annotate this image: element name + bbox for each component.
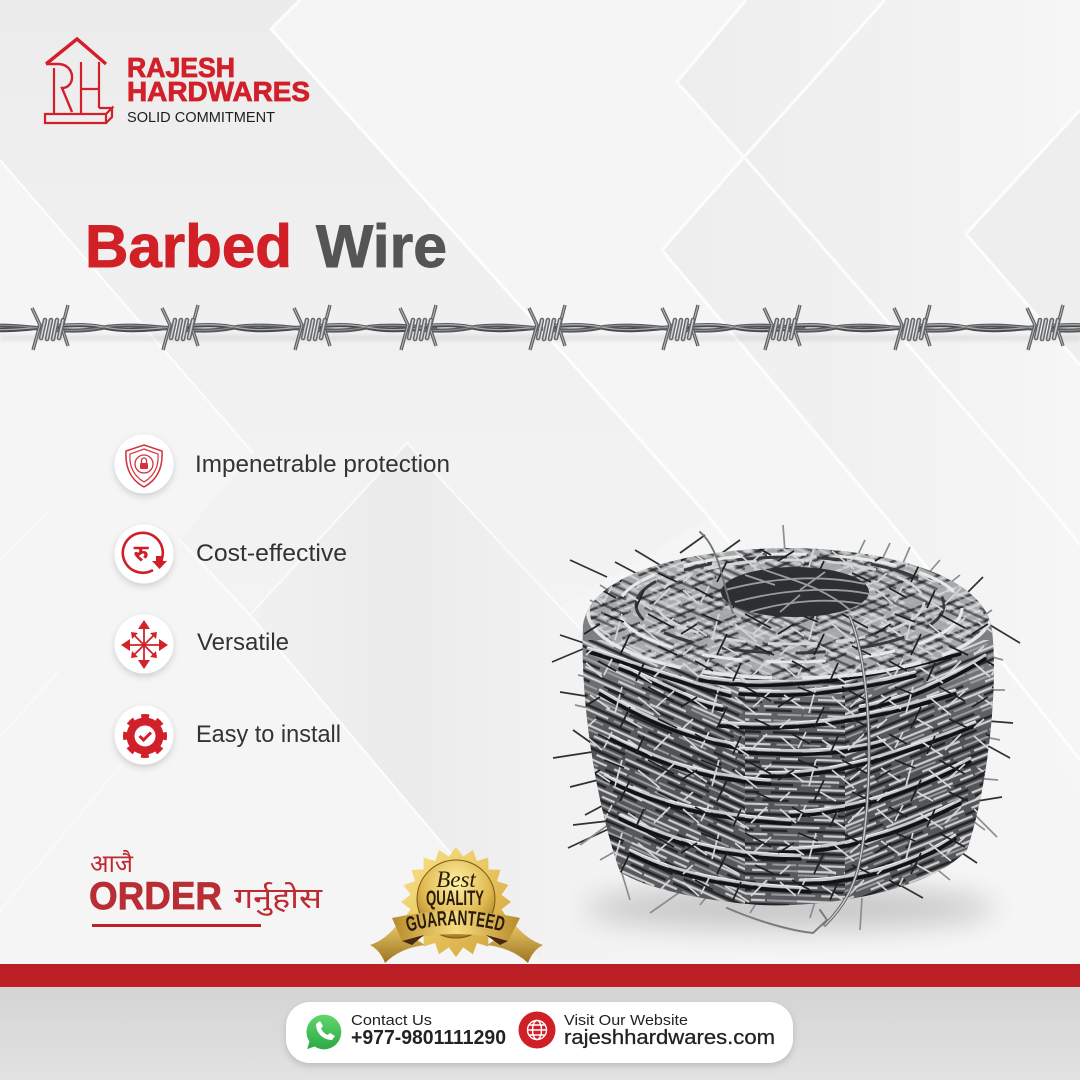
contact phone text — [351, 1013, 506, 1049]
logo: Rajesh Hardwares: HARDWARES — [127, 76, 310, 107]
website text: rajeshhardwares.com — [564, 1027, 775, 1049]
badge: best quality guaranteed: GUARANTEED — [406, 910, 504, 931]
logo wordmark: RAJESH — [127, 52, 235, 83]
icon: rupee with down arrow — [114, 524, 174, 584]
badge: best quality guaranteed: QUALITY — [426, 887, 484, 910]
feature: cost-effective — [114, 524, 347, 584]
contact phone text: Contact Us — [351, 1013, 432, 1029]
barbed wire strand — [0, 305, 1080, 350]
title: Wire — [316, 213, 447, 280]
feature: versatile: Versatile — [197, 629, 289, 656]
badge: best quality guaranteed: Best — [436, 867, 476, 892]
icon: globe — [518, 1012, 556, 1048]
order call to action: गर्नुहोस — [234, 882, 324, 916]
contact phone text: +977-9801111290 — [351, 1027, 506, 1049]
feature: cost-effective: Cost-effective — [196, 540, 347, 567]
badge: best quality guaranteed — [370, 847, 543, 963]
feature: easy to install: Easy to install — [196, 721, 341, 748]
website text: Visit Our Website — [564, 1013, 688, 1029]
icon: whatsapp — [306, 1014, 342, 1050]
order call to action — [89, 848, 324, 927]
icon: rupee with down arrow: रु — [134, 540, 150, 566]
order call to action: आजै — [90, 848, 133, 878]
website text — [564, 1013, 775, 1049]
product: barbed wire coil — [552, 525, 1020, 933]
logo tagline: SOLID COMMITMENT — [127, 109, 275, 126]
icon: RH house logo — [45, 39, 112, 123]
title: Barbed — [85, 213, 292, 280]
order call to action: ORDER — [89, 875, 222, 918]
feature: versatile — [114, 614, 289, 674]
feature: easy to install — [114, 706, 341, 764]
feature: impenetrable protection: Impenetrable protection — [195, 451, 450, 478]
logo: Rajesh Hardwares — [45, 39, 310, 126]
icon: gear with check — [114, 706, 174, 764]
footer band — [0, 964, 1080, 1080]
coil top surface — [584, 548, 994, 680]
feature: impenetrable protection — [114, 434, 450, 494]
icon: multi-direction arrows — [114, 614, 174, 674]
icon: shield with lock — [114, 434, 174, 494]
contact pill — [286, 1002, 793, 1063]
title — [85, 213, 447, 280]
